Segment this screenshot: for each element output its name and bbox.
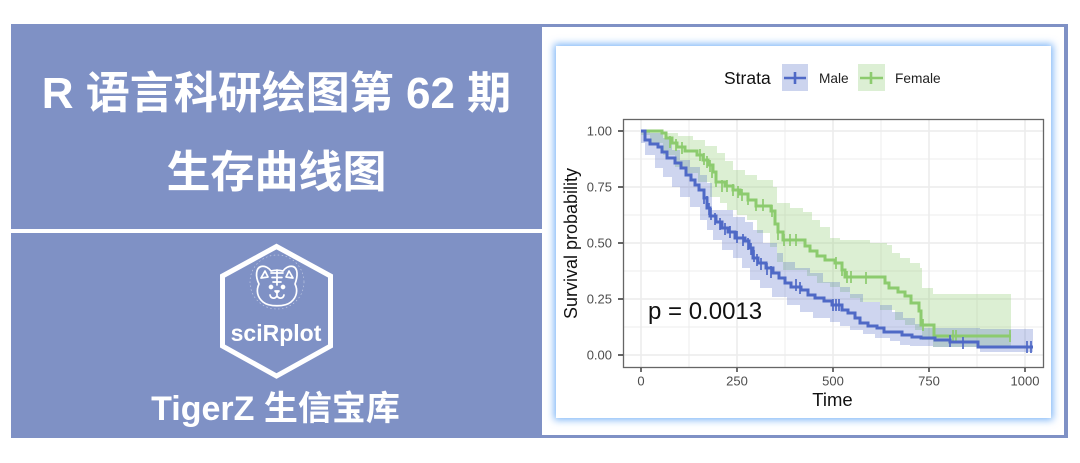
brand text: TigerZ 生信宝库	[151, 390, 400, 428]
survival chart	[561, 119, 1044, 410]
plot grid	[623, 119, 1043, 367]
panel: logo	[151, 246, 400, 428]
legend key: female	[858, 64, 885, 91]
y axis tick labels: 0.00	[587, 348, 612, 362]
title line 2: 生存曲线图	[166, 148, 386, 197]
y axis tick labels	[587, 124, 612, 362]
x axis tick labels	[637, 374, 1039, 388]
x axis title: Time	[812, 389, 853, 410]
survival curve: female	[641, 131, 1011, 342]
legend key: male	[782, 64, 808, 91]
survival curve: male	[641, 131, 1033, 353]
x axis tick labels: 750	[918, 374, 940, 388]
x axis tick labels: 0	[637, 374, 645, 388]
y axis tick labels: 0.50	[587, 236, 612, 250]
icon: tiger face	[250, 255, 304, 309]
divider	[11, 229, 542, 233]
panel: chart container	[542, 27, 1064, 435]
p value: p = 0.0013	[648, 298, 762, 325]
legend title: Strata	[724, 68, 771, 88]
panel: title	[11, 24, 541, 229]
x axis tick labels: 250	[726, 374, 748, 388]
legend label: male: Male	[819, 71, 849, 86]
legend label: female: Female	[895, 71, 941, 86]
logo text: sciRplot	[231, 320, 322, 346]
plot border	[624, 120, 1044, 368]
axis ticks	[618, 131, 1025, 372]
confidence band: female	[641, 130, 1011, 347]
y axis tick labels: 1.00	[587, 124, 612, 138]
confidence band: male	[641, 130, 1033, 352]
icon: hexagon badge	[222, 246, 330, 376]
x axis tick labels: 500	[822, 374, 844, 388]
y axis title: Survival probability	[561, 168, 581, 319]
y axis tick labels: 0.75	[587, 180, 612, 194]
y axis tick labels: 0.25	[587, 292, 612, 306]
legend	[724, 64, 941, 91]
title line 1: R 语言科研绘图第 62 期	[42, 69, 511, 118]
x axis tick labels: 1000	[1011, 374, 1039, 388]
